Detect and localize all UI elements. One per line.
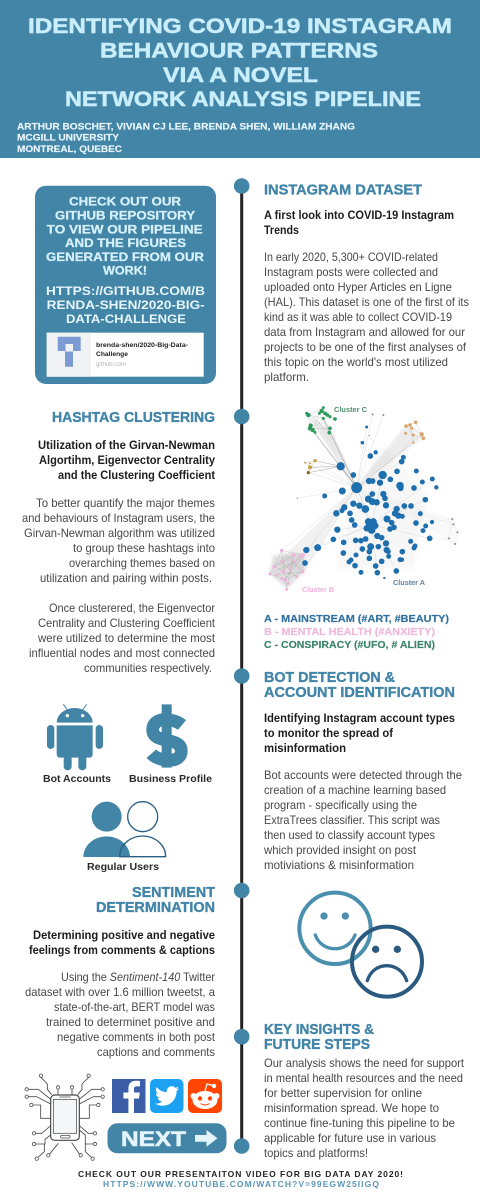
repository url: RENDA-SHEN/2020-BIG- — [47, 298, 205, 312]
heading: INSTAGRAM DATASET — [264, 182, 422, 198]
panel: github callout — [35, 186, 216, 384]
subheading: Identifying Instagram account types — [264, 713, 455, 725]
social icons — [112, 1079, 222, 1113]
heading: HASHTAG CLUSTERING — [52, 410, 215, 426]
header banner — [0, 0, 480, 158]
heading: SENTIMENT — [132, 885, 215, 901]
heading: KEY INSIGHTS & — [264, 1022, 374, 1038]
body text: ExtraTrees classifier. This script was — [264, 813, 440, 827]
cluster labels: Cluster A — [393, 578, 425, 587]
timeline — [234, 178, 250, 1154]
callout heading: TO VIEW OUR PIPELINE — [47, 223, 203, 236]
body text — [264, 250, 469, 384]
body text: influential nodes and most connected — [29, 646, 215, 660]
label: regular users: Regular Users — [87, 861, 159, 873]
subheading: Determining positive and negative — [33, 930, 215, 942]
icon: facebook — [112, 1079, 146, 1113]
icon: happy and sad faces — [299, 893, 422, 997]
body text: negative comments in both post — [57, 1030, 216, 1044]
icon: regular users — [83, 802, 166, 857]
github link card: github.com — [96, 362, 126, 368]
title: BEHAVIOUR PATTERNS — [100, 38, 378, 62]
body text: In early 2020, 5,300+ COVID-related — [264, 250, 438, 264]
pink nodes — [269, 549, 305, 591]
body text: misinformation spread. We hope to — [264, 1101, 439, 1115]
repository url: HTTPS://GITHUB.COM/B — [46, 284, 205, 298]
body text: state-of-the-art, BERT model was — [54, 1000, 215, 1014]
body text: trained to determinet positive and — [46, 1015, 215, 1029]
subheading: to monitor the spread of — [264, 728, 393, 740]
body text: Once clusterered, the Eigenvector — [49, 601, 215, 615]
cluster labels — [302, 405, 425, 594]
body text: dataset with over 1.6 million tweetst, a — [25, 985, 215, 999]
network graph — [269, 405, 458, 594]
orange nodes — [404, 421, 425, 444]
body text: Girvan-Newman algorithm was utilized — [24, 526, 215, 540]
subheading: and the Clustering Coefficient — [58, 470, 215, 482]
authors and affiliation: ARTHUR BOSCHET, VIVIAN CJ LEE, BRENDA SHEN, WILLIAM ZHANG — [17, 122, 355, 132]
github link card: Challenge — [96, 351, 128, 358]
body text: uploaded onto Hyper Articles en Ligne — [264, 280, 452, 294]
authors and affiliation: MCGILL UNIVERSITY — [17, 132, 120, 144]
cluster legend: C - CONSPIRACY (#UFO, # ALIEN) — [264, 640, 435, 651]
body text: and behaviours of Instagram users, the — [22, 511, 215, 525]
footer video link — [78, 1169, 403, 1189]
heading — [264, 1022, 374, 1053]
github link card: brenda-shen/2020-Big-Data- — [96, 342, 188, 349]
authors and affiliation: MONTREAL, QUEBEC — [17, 144, 122, 155]
title — [28, 14, 452, 111]
heading — [96, 885, 215, 916]
cluster legend: A - MAINSTREAM (#ART, #BEAUTY) — [264, 614, 449, 625]
cluster legend — [264, 614, 449, 651]
body text: Instagram posts were collected and — [264, 265, 438, 279]
subheading — [38, 440, 216, 482]
body text: then used to classify account types — [264, 828, 435, 842]
cluster A nodes — [303, 426, 438, 579]
body text — [25, 970, 216, 1059]
github link card — [47, 333, 204, 377]
body text: To better quantify the major themes — [36, 496, 215, 510]
subheading — [29, 930, 215, 957]
grey nodes — [297, 413, 458, 545]
gold nodes — [304, 459, 317, 474]
body text — [263, 768, 462, 872]
body text: Bot accounts were detected through the — [264, 768, 462, 782]
subheading: Algortihm, Eigenvector Centrality — [39, 455, 216, 467]
subheading: feelings from comments & captions — [29, 945, 215, 957]
repository url — [46, 284, 205, 326]
body text: platform. — [264, 370, 309, 384]
body text: topics and platforms! — [264, 1146, 368, 1160]
icon: reddit — [188, 1079, 222, 1113]
body text: for better supervision for online — [264, 1086, 422, 1100]
subheading — [264, 210, 454, 237]
body text: communities respectively. — [84, 661, 212, 675]
panel: hashtag clustering — [22, 410, 216, 675]
panel: bot detection — [263, 670, 462, 872]
title: IDENTIFYING COVID-19 INSTAGRAM — [28, 14, 452, 38]
body text: applicable for future use in various — [264, 1131, 436, 1145]
body text: projects to be one of the first analyses of — [264, 340, 467, 354]
subheading: Utilization of the Girvan-Newman — [38, 440, 215, 452]
icon: dollar sign — [151, 704, 182, 768]
callout heading: WORK! — [103, 264, 147, 278]
body text: program - specifically using the — [264, 798, 417, 812]
icon: twitter — [150, 1079, 184, 1113]
body text: Centrality and Clustering Coefficient — [38, 616, 216, 630]
icon: android bot — [47, 704, 103, 770]
icon: next arrow — [195, 1130, 218, 1147]
body text: were utilized to determine the most — [37, 631, 216, 645]
icon: circuit phone — [25, 1074, 104, 1160]
body text: motiviations & misinformation — [264, 858, 414, 872]
body text: in mental health resources and the need — [264, 1071, 463, 1085]
subheading: A first look into COVID-19 Instagram — [264, 210, 454, 222]
body text — [264, 1056, 465, 1160]
panel: instagram dataset — [264, 182, 469, 384]
callout heading — [46, 196, 205, 278]
body text: data from Instagram and allowed for our — [264, 325, 465, 339]
body text: captions and comments — [97, 1045, 215, 1059]
label: business profile: Business Profile — [129, 773, 212, 785]
subheading — [264, 713, 455, 755]
cluster labels: Cluster B — [302, 585, 334, 594]
heading: ACCOUNT IDENTIFICATION — [264, 685, 455, 701]
body text: creation of a machine learning based — [264, 783, 446, 797]
next button: NEXT — [121, 1128, 186, 1151]
heading — [264, 670, 455, 701]
subheading: Trends — [264, 225, 299, 237]
body text: kind as it was able to collect COVID-19 — [264, 310, 452, 324]
body text: which provided insight on post — [263, 843, 417, 857]
title: NETWORK ANALYSIS PIPELINE — [65, 87, 421, 111]
footer video link: CHECK OUT OUR PRESENTAITON VIDEO FOR BIG DATA DAY 2020! — [78, 1169, 403, 1179]
callout heading: GENERATED FROM OUR — [46, 251, 205, 264]
callout heading: GITHUB REPOSITORY — [55, 209, 195, 222]
account type icons — [43, 704, 212, 873]
subheading: misinformation — [264, 743, 346, 755]
panel: sentiment determination — [25, 885, 216, 1059]
next button — [108, 1123, 226, 1153]
footer video link: HTTPS://WWW.YOUTUBE.COM/WATCH?V=99EGW25IIGQ — [103, 1179, 379, 1189]
heading: FUTURE STEPS — [264, 1037, 370, 1053]
body text: overarching themes based on — [69, 556, 215, 570]
cluster legend: B - MENTAL HEALTH (#ANXIETY) — [264, 627, 435, 638]
authors and affiliation — [17, 122, 355, 155]
repository url: DATA-CHALLENGE — [66, 312, 186, 326]
cluster C nodes — [305, 406, 337, 434]
body text: to group these hashtags into — [73, 541, 215, 555]
callout heading: CHECK OUT OUR — [69, 196, 182, 208]
cluster labels: Cluster C — [334, 405, 367, 414]
body text: Using the Sentiment-140 Twitter — [61, 970, 215, 984]
body text: Our analysis shows the need for support — [264, 1056, 465, 1070]
label: bot accounts: Bot Accounts — [43, 773, 111, 785]
callout heading: AND THE FIGURES — [65, 237, 186, 250]
panel: key insights — [264, 1022, 465, 1160]
body text: utilization and pairing within posts. — [40, 571, 212, 585]
title: VIA A NOVEL — [163, 63, 318, 87]
body text — [22, 496, 216, 675]
heading: BOT DETECTION & — [264, 670, 396, 686]
body text: this topic on the world's most utilized — [264, 355, 448, 369]
body text: continue fine-tuning this pipeline to be — [264, 1116, 455, 1130]
heading: DETERMINATION — [96, 900, 215, 916]
